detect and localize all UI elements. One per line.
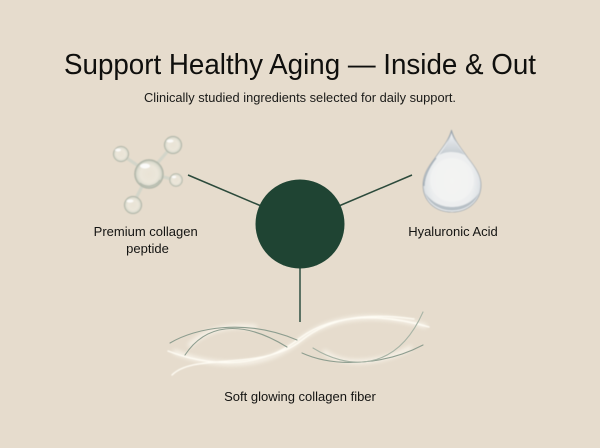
subtitle: Clinically studied ingredients selected for daily support. — [144, 90, 456, 105]
connector: molecule to hub — [188, 175, 260, 206]
label: soft glowing collagen fiber: Soft glowing collagen fiber — [224, 389, 377, 404]
molecule highlights — [115, 139, 176, 203]
label: premium collagen peptide: peptide — [126, 241, 169, 256]
connector: hub to fiber — [299, 266, 301, 322]
icon: hyaluronic acid droplet — [423, 130, 481, 212]
droplet top facet — [439, 133, 465, 155]
title: Support Healthy Aging — Inside & Out — [64, 49, 536, 81]
label: premium collagen peptide: Premium collagen — [94, 224, 198, 239]
droplet inner highlight — [430, 158, 474, 202]
droplet body — [423, 130, 481, 212]
connector: droplet to hub — [340, 175, 412, 206]
molecule spheres — [113, 136, 182, 214]
fiber sage strands — [170, 312, 423, 362]
fiber glow — [175, 318, 425, 363]
label: hyaluronic acid: Hyaluronic Acid — [408, 224, 498, 239]
fiber bright strands — [168, 316, 429, 375]
icon: collagen peptide molecule — [113, 136, 182, 214]
droplet rim shadow — [425, 193, 479, 210]
icon: glowing collagen fiber — [168, 312, 429, 375]
molecule shade — [140, 180, 160, 186]
central hub circle — [256, 180, 344, 268]
droplet left edge — [424, 158, 436, 186]
molecule bonds — [122, 145, 175, 204]
